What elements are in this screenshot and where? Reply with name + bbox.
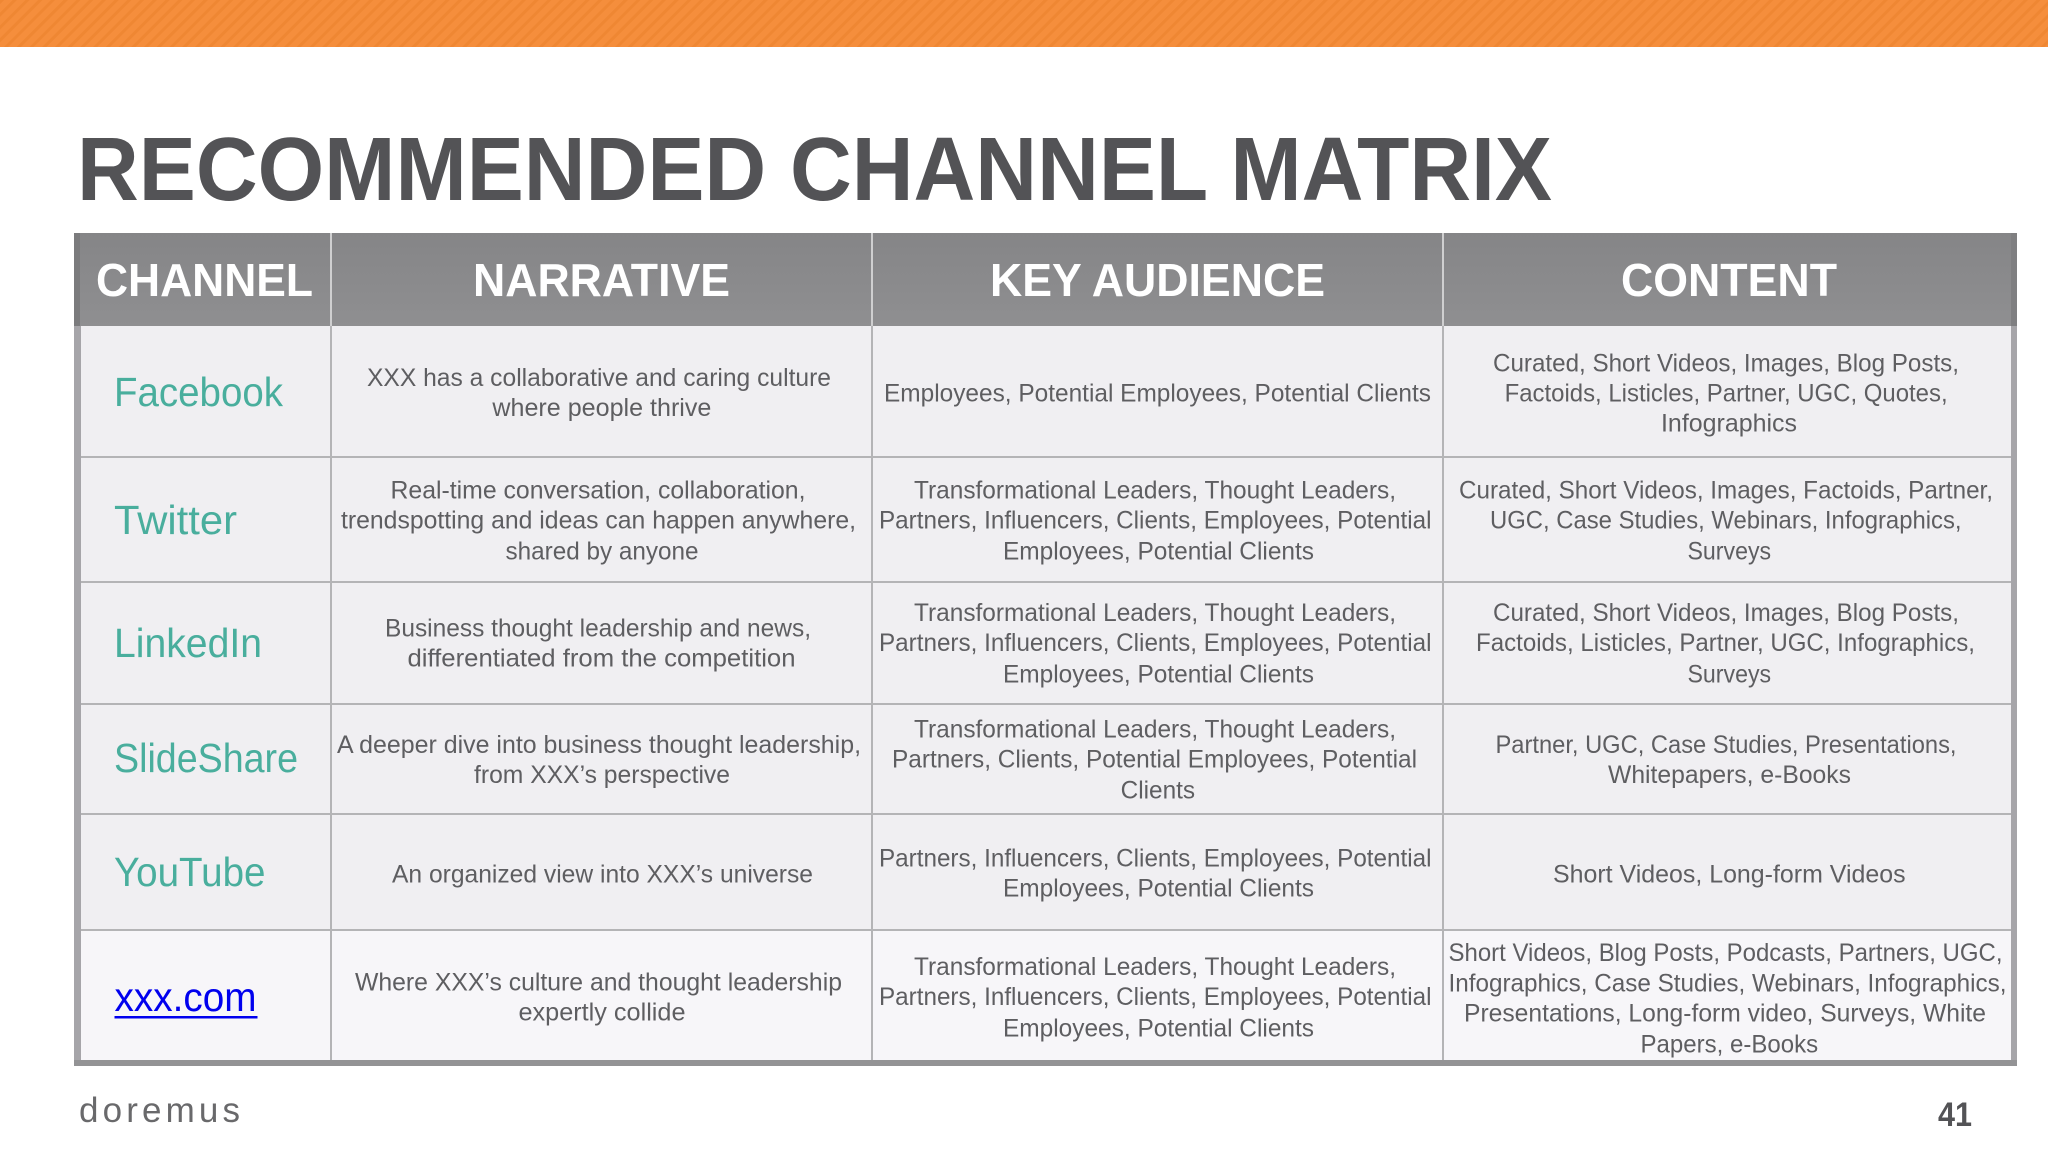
row: Facebook [114, 350, 1959, 438]
row: SlideShare: SlideShare [114, 735, 298, 781]
row: xxx.com: Infographics, Case Studies, Webinars, Infographics, [1448, 970, 2006, 998]
row: LinkedIn: LinkedIn [114, 620, 262, 666]
row: YouTube: Short Videos, Long-form Videos [1553, 860, 1906, 888]
row: xxx.com: Partners, Influencers, Clients, Employees, Potential [879, 983, 1432, 1011]
row: Facebook: Factoids, Listicles, Partner, UGC, Quotes, [1505, 380, 1948, 408]
row: Facebook: Curated, Short Videos, Images, Blog Posts, [1493, 350, 1959, 378]
row: LinkedIn: Business thought leadership and news, [385, 614, 811, 642]
row: xxx.com: xxx.com [114, 974, 256, 1020]
row: YouTube: An organized view into XXX’s universe [392, 860, 813, 888]
row: Facebook: Facebook [114, 369, 283, 415]
row: SlideShare: Partners, Clients, Potential Employees, Potential [892, 746, 1417, 774]
row: LinkedIn: Partners, Influencers, Clients, Employees, Potential [879, 629, 1432, 657]
row: xxx.com: Employees, Potential Clients [1003, 1014, 1314, 1042]
row: SlideShare: Whitepapers, e-Books [1608, 761, 1851, 789]
row: Facebook: where people thrive [491, 394, 711, 422]
row: LinkedIn: Curated, Short Videos, Images, Blog Posts, [1493, 599, 1959, 627]
row: Twitter: Real-time conversation, collaboration, [390, 476, 806, 504]
row: xxx.com: Papers, e-Books [1640, 1030, 1818, 1058]
row: Twitter: Curated, Short Videos, Images, Factoids, Partner, [1459, 476, 1993, 504]
row: Facebook: XXX has a collaborative and caring culture [367, 364, 831, 392]
row: SlideShare: from XXX’s perspective [474, 761, 730, 789]
row: Twitter: UGC, Case Studies, Webinars, Infographics, [1490, 506, 1962, 534]
row: SlideShare: Clients [1121, 776, 1195, 804]
row: Facebook: Employees, Potential Employees, Potential Clients [884, 380, 1431, 408]
row: LinkedIn: Employees, Potential Clients [1003, 660, 1314, 688]
row: Twitter: shared by anyone [506, 538, 698, 566]
row: xxx.com: Presentations, Long-form video, Surveys, White [1464, 1000, 1986, 1028]
row: LinkedIn: differentiated from the competition [408, 644, 796, 672]
row: Twitter: Twitter [114, 497, 237, 543]
table header row: CONTENT [1621, 254, 1837, 306]
table header row [74, 233, 2017, 326]
row: xxx.com: Transformational Leaders, Thought Leaders, [914, 953, 1396, 981]
row: YouTube: Partners, Influencers, Clients, Employees, Potential [879, 844, 1432, 872]
row: SlideShare: A deeper dive into business thought leadership, [337, 731, 861, 759]
row: SlideShare [114, 716, 1956, 804]
row: xxx.com: Short Videos, Blog Posts, Podcasts, Partners, UGC, [1448, 939, 2002, 967]
row: SlideShare: Transformational Leaders, Thought Leaders, [914, 716, 1396, 744]
row: SlideShare: Partner, UGC, Case Studies, Presentations, [1496, 731, 1956, 759]
row: Facebook: Infographics [1661, 410, 1797, 438]
table header row: KEY AUDIENCE [990, 254, 1325, 306]
row: LinkedIn: Transformational Leaders, Thought Leaders, [914, 599, 1396, 627]
row: Twitter: trendspotting and ideas can happen anywhere, [341, 506, 856, 534]
row: Twitter [114, 476, 1993, 566]
table header row: CHANNEL [96, 254, 313, 306]
row: xxx.com: expertly collide [518, 998, 686, 1026]
row: LinkedIn [114, 599, 1975, 688]
row: Twitter: Surveys [1688, 538, 1771, 566]
row: Twitter: Partners, Influencers, Clients, Employees, Potential [879, 506, 1432, 534]
row: YouTube: YouTube [114, 849, 266, 895]
row: xxx.com [114, 939, 2006, 1058]
table frame and row backgrounds [74, 233, 2017, 1066]
row: xxx.com: Where XXX’s culture and thought leadership [355, 968, 842, 996]
row: YouTube: Employees, Potential Clients [1003, 874, 1314, 902]
top orange banner [0, 0, 2048, 47]
title: RECOMMENDED CHANNEL MATRIX [77, 120, 1552, 220]
row: Twitter: Employees, Potential Clients [1003, 538, 1314, 566]
page number: 41 [1938, 1096, 1972, 1134]
doremus wordmark: doremus [79, 1091, 240, 1130]
row: Twitter: Transformational Leaders, Thought Leaders, [914, 476, 1396, 504]
row: LinkedIn: Surveys [1688, 660, 1771, 688]
table header row: NARRATIVE [473, 254, 730, 306]
channel matrix table [74, 233, 2017, 1066]
row: LinkedIn: Factoids, Listicles, Partner, UGC, Infographics, [1476, 629, 1975, 657]
row: YouTube [114, 844, 1906, 902]
